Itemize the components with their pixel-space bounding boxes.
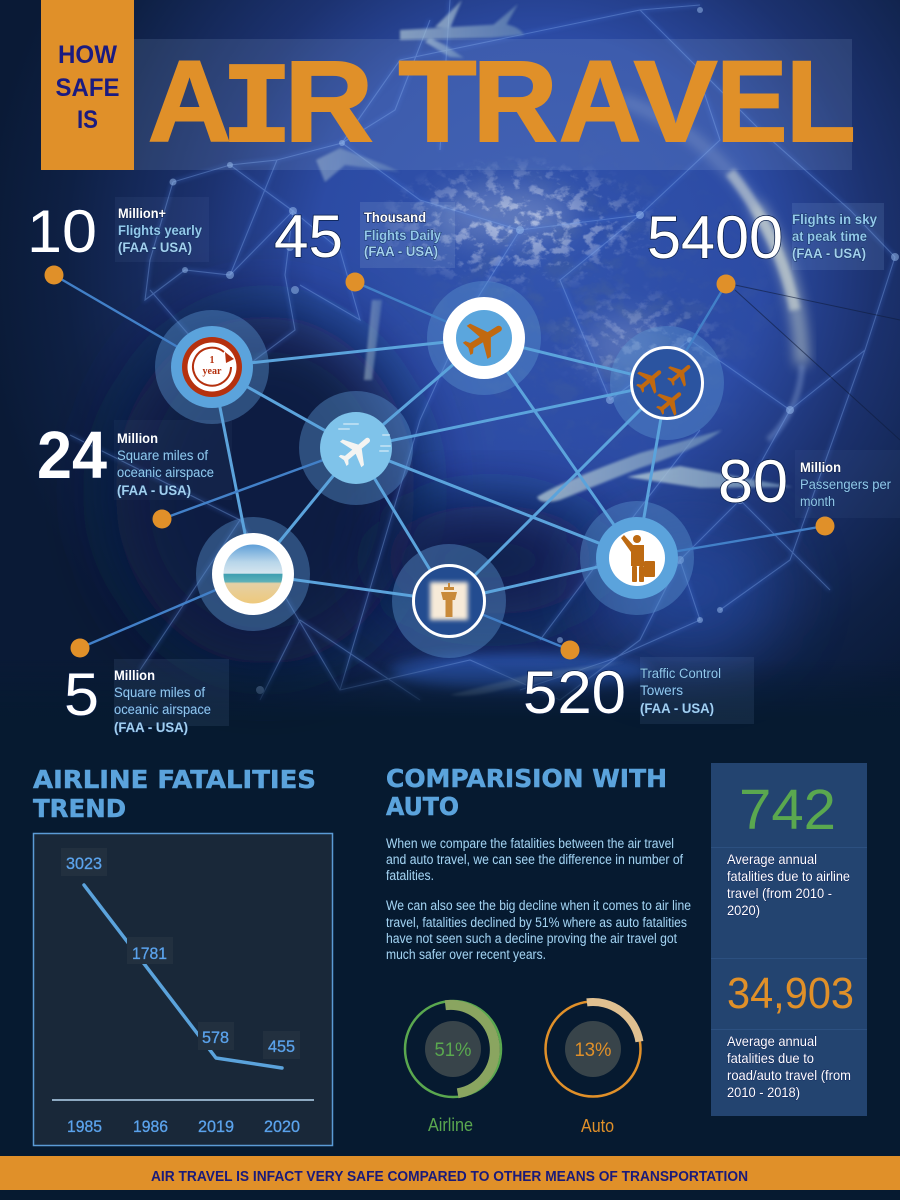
stat: 5400 flights in sky [647,203,884,271]
title banner [134,37,856,176]
line chart: airline fatalities: 1985 [67,1117,102,1136]
icon: white plane [320,412,392,484]
airline fatalities figure: travel (from 2010 - [727,885,832,901]
comparison paragraphs: travel, fatalities declined by 51% where as auto fatalities [386,915,687,930]
stat: 10 million flights yearly: 10 [27,198,97,265]
panel: fatality figures [711,763,867,1116]
stat: 80 million passengers: month [800,494,835,509]
road fatalities figure: road/auto travel (from [727,1067,851,1083]
donut: auto 13%: Auto [581,1116,614,1136]
network connector lines [54,275,825,650]
comparison paragraphs [386,836,691,962]
icon: plane in white ring [443,297,525,379]
stat: 10 million flights yearly: Million+ [118,206,166,221]
road fatalities figure: Average annual [727,1033,817,1049]
title: air travel: R [284,38,373,166]
airline fatalities figure: Average annual [727,851,817,867]
stat: 10 million flights yearly: Flights yearly [118,223,202,238]
stat: 80 million passengers [718,448,900,518]
stat: 5400 flights in sky: 5400 [647,204,783,271]
heading: airline fatalities trend [33,765,316,823]
comparison paragraphs: When we compare the fatalities between the air travel [386,836,674,851]
icon: control tower [414,566,484,636]
icon: passenger with suitcase [596,517,678,599]
heading: comparision with auto [386,764,667,821]
icon: one year cycle: 1 [210,355,214,366]
stat: 520 traffic control towers [523,657,754,726]
road fatalities figure: 2010 - 2018) [727,1084,800,1100]
title: air travel: I [221,46,293,176]
stat: 45 thousand flights daily: (FAA - USA) [364,244,438,259]
stat: 45 thousand flights daily [274,202,455,270]
airline fatalities figure [727,778,850,918]
footer banner [0,1156,900,1190]
title: air travel: R [473,37,558,166]
donut: airline 51% [405,1001,501,1135]
stat: 45 thousand flights daily: Thousand [364,210,426,225]
stat: 5400 flights in sky: Flights in sky [792,212,877,227]
title: air travel: A [148,38,231,166]
donut: auto 13%: 13% [574,1040,612,1061]
road fatalities figure [727,969,854,1100]
stat: 10 million flights yearly: (FAA - USA) [118,240,192,255]
title: air travel [148,37,856,176]
line chart: airline fatalities: 3023 [66,854,102,873]
node halos [155,281,724,658]
stat: 5 million square miles: oceanic airspace [114,702,211,717]
line chart: airline fatalities: 2019 [198,1117,234,1136]
airline fatalities figure: 742 [739,778,836,842]
stat: 5400 flights in sky: at peak time [792,229,867,244]
line chart: airline fatalities [34,834,332,1146]
road fatalities figure: fatalities due to [727,1050,814,1066]
stat: 520 traffic control towers: Traffic Control [640,666,721,681]
line chart: airline fatalities: 2020 [264,1117,300,1136]
footer banner: AIR TRAVEL IS INFACT VERY SAFE COMPARED TO OTHER MEANS OF TRANSPORTATION [151,1169,748,1185]
hero background: earth and network [0,0,900,720]
icon: one year cycle: year [203,366,222,377]
stat: 24 million square miles: (FAA - USA) [117,483,191,498]
line chart: airline fatalities: 1986 [133,1117,168,1136]
icon: beach photo [212,533,294,615]
icon: three planes [631,348,702,421]
how safe is tag: IS [77,106,98,134]
comparison paragraphs: fatalities. [386,868,434,883]
line chart: airline fatalities: 455 [268,1037,295,1056]
stat: 5 million square miles: Million [114,668,155,683]
stat: 80 million passengers: Passengers per [800,477,891,492]
stat: 24 million square miles: 24 [37,418,107,493]
donut: airline 51%: 51% [434,1040,472,1061]
icon: one year cycle [171,326,253,408]
stat: 24 million square miles: oceanic airspace [117,465,214,480]
airline fatalities figure: fatalities due to airline [727,868,850,884]
donut: auto 13% [546,1002,640,1136]
stat: 520 traffic control towers: Towers [640,683,683,698]
orange marker dots [44,266,834,660]
comparison paragraphs: much safer over recent years. [386,947,546,962]
stat: 45 thousand flights daily: Flights Daily [364,228,441,243]
stat: 45 thousand flights daily: 45 [274,203,343,270]
stat: 80 million passengers: 80 [718,448,788,515]
stat: 24 million square miles: Square miles of [117,448,208,463]
how safe is tag: HOW [58,41,117,69]
line chart: airline fatalities: 578 [202,1028,229,1047]
stat: 5 million square miles: Square miles of [114,685,205,700]
heading: comparision with auto: AUTO [386,792,459,821]
how safe is tag: SAFE [56,74,120,102]
stat: 24 million square miles: Million [117,431,158,446]
stat: 5 million square miles: 5 [64,661,99,728]
stat: 520 traffic control towers: 520 [523,659,626,726]
comparison paragraphs: We can also see the big decline when it comes to air line [386,898,691,913]
stat: 24 million square miles [37,418,232,500]
title: air travel: A [559,37,641,166]
comparison paragraphs: have not seen such a decline proving the air travel got [386,931,677,946]
comparison paragraphs: and auto travel, we can see the difference in number of [386,852,683,867]
stat: 80 million passengers: Million [800,460,841,475]
stat: 5 million square miles [64,659,229,735]
stat: 5400 flights in sky: (FAA - USA) [792,246,866,261]
line chart: airline fatalities: 1781 [132,944,167,963]
title: air travel: T [398,37,476,166]
title: air travel: L [786,37,856,166]
donut: airline 51%: Airline [428,1115,473,1135]
stat: 5 million square miles: (FAA - USA) [114,720,188,735]
heading: airline fatalities trend: AIRLINE FATALITIES [33,765,316,794]
stat: 10 million flights yearly [27,197,209,265]
title: air travel: E [717,38,787,166]
how safe is tag [41,0,134,170]
heading: airline fatalities trend: TREND [33,794,126,823]
road fatalities figure: 34,903 [727,969,854,1018]
heading: comparision with auto: COMPARISION WITH [386,764,667,793]
title: air travel: V [634,37,717,166]
airline fatalities figure: 2020) [727,902,760,918]
stat: 520 traffic control towers: (FAA - USA) [640,701,714,716]
